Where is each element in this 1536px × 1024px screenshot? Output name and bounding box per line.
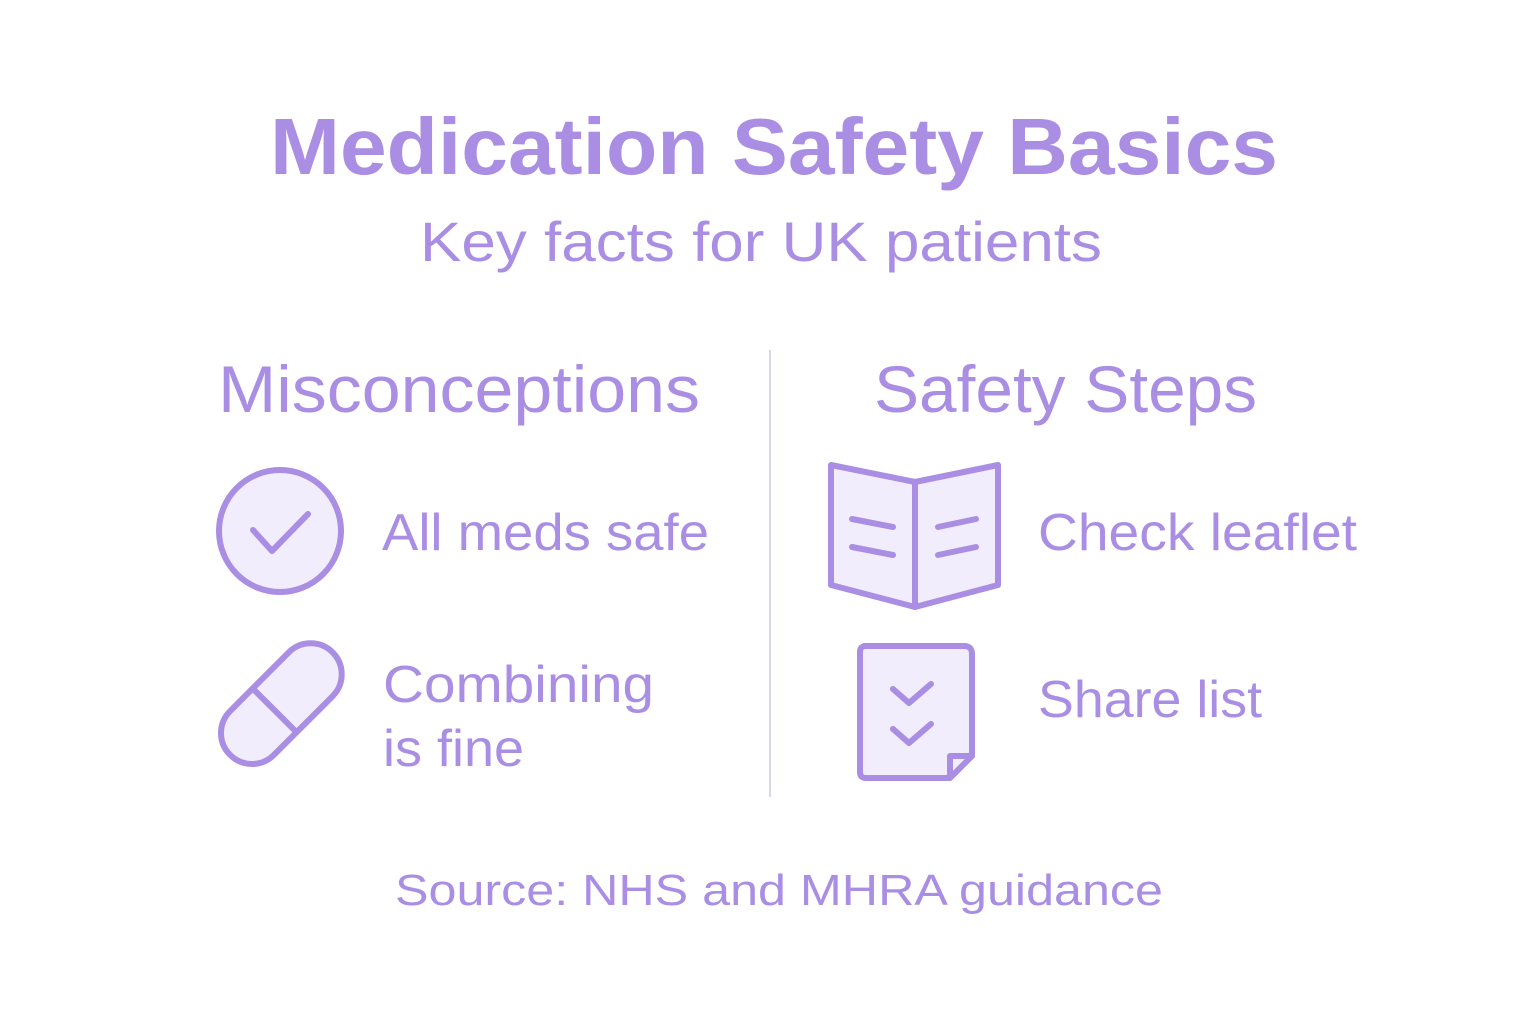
text: share list: Share list bbox=[1038, 671, 1263, 729]
heading: safety steps: Safety Steps bbox=[874, 352, 1257, 426]
title: Medication Safety Basics bbox=[270, 102, 1278, 191]
icon: checklist bbox=[860, 646, 972, 778]
text: combining is fine: Combining bbox=[383, 656, 654, 714]
icon: check circle bbox=[219, 470, 341, 592]
text: check leaflet: Check leaflet bbox=[1038, 504, 1358, 562]
icon: pill bbox=[208, 630, 355, 777]
heading: misconceptions: Misconceptions bbox=[218, 352, 700, 426]
panel: misconceptions bbox=[208, 352, 709, 778]
subtitle: Key facts for UK patients bbox=[420, 210, 1102, 273]
divider bbox=[769, 350, 771, 797]
icon: open leaflet bbox=[831, 465, 998, 607]
text: combining is fine bbox=[383, 656, 654, 778]
panel: safety steps bbox=[831, 352, 1358, 778]
source note: Source: NHS and MHRA guidance bbox=[395, 866, 1163, 915]
text: all meds safe: All meds safe bbox=[382, 504, 709, 562]
text: combining is fine: is fine bbox=[383, 720, 524, 778]
